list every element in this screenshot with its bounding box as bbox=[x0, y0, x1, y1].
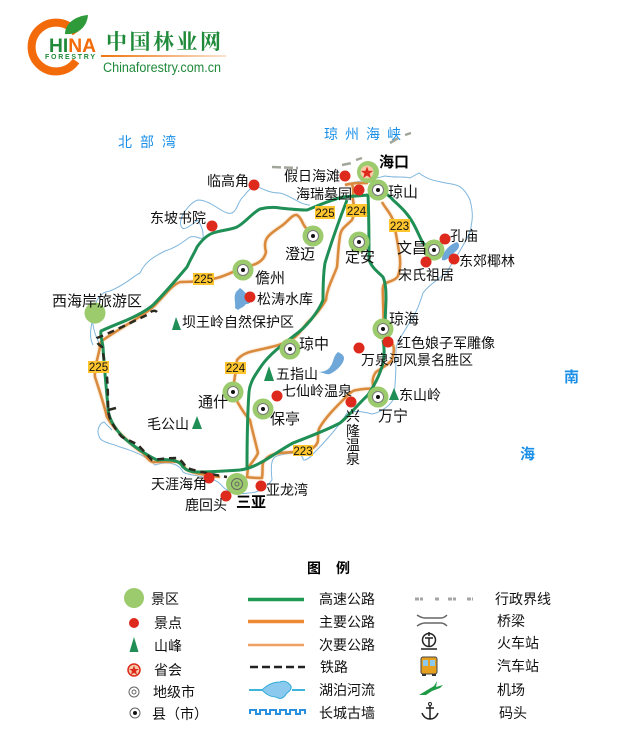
place labels: 保亭 bbox=[270, 410, 300, 428]
logo: China Forestry bbox=[32, 15, 226, 75]
place labels: 坝王岭自然保护区 bbox=[182, 314, 294, 330]
legend: scenic area bbox=[124, 588, 179, 608]
lakes bbox=[235, 242, 459, 374]
place labels: 琼海 bbox=[389, 311, 419, 328]
legend: great wall: 长城古墙 bbox=[319, 705, 375, 721]
sea labels: 海 bbox=[520, 445, 535, 463]
place labels: 鹿回头 bbox=[185, 497, 227, 513]
place labels: 天涯海角 bbox=[151, 476, 207, 492]
place labels: 定安 bbox=[345, 249, 375, 266]
legend: main road: 主要公路 bbox=[319, 614, 375, 630]
logo wordmark HINA: HINA bbox=[49, 36, 96, 57]
place labels: 孔庙 bbox=[450, 228, 478, 244]
legend: airport: 机场 bbox=[497, 682, 525, 698]
legend: lake and river bbox=[249, 681, 375, 698]
place labels: 假日海滩 bbox=[284, 168, 340, 184]
legend: county city: 县（市） bbox=[152, 706, 208, 722]
legend: lake and river: 湖泊河流 bbox=[319, 682, 375, 698]
map bbox=[52, 126, 579, 513]
place labels: 兴 bbox=[346, 408, 360, 424]
place labels: 琼中 bbox=[299, 336, 329, 353]
place labels: 西海岸旅游区 bbox=[52, 293, 142, 310]
legend: expressway: 高速公路 bbox=[319, 591, 375, 607]
administrative boundary bbox=[272, 133, 411, 168]
place labels: 文昌 bbox=[397, 240, 427, 257]
place labels: 泉 bbox=[346, 451, 360, 467]
place labels: 临高角 bbox=[207, 173, 249, 189]
route 225 central: 225 bbox=[194, 274, 213, 286]
place labels: 松涛水库 bbox=[257, 291, 313, 307]
sea labels: 琼州海峡 bbox=[324, 126, 408, 142]
legend: railway station bbox=[421, 632, 539, 651]
route 223 north: 223 bbox=[390, 221, 409, 233]
legend: bus station: 汽车站 bbox=[497, 658, 539, 674]
legend: prefecture city: 地级市 bbox=[153, 684, 195, 700]
legend: great wall bbox=[250, 705, 375, 721]
legend: airport bbox=[419, 681, 525, 698]
legend: scenic spot: 景点 bbox=[154, 615, 182, 631]
place labels: 海口 bbox=[379, 153, 409, 171]
highways bbox=[101, 190, 432, 472]
legend: bus station bbox=[421, 657, 539, 676]
place labels: 七仙岭温泉 bbox=[282, 383, 352, 399]
place labels: 宋氏祖居 bbox=[398, 267, 454, 283]
sea labels bbox=[118, 126, 579, 463]
lake: Wenchang bbox=[442, 242, 459, 260]
legend: railway station: 火车站 bbox=[497, 635, 539, 651]
legend: provincial capital: 省会 bbox=[154, 662, 182, 678]
logo rule bbox=[101, 55, 226, 57]
place labels: 隆 bbox=[346, 423, 360, 439]
city markers bbox=[222, 180, 444, 495]
secondary and main roads bbox=[95, 183, 400, 478]
legend: dock bbox=[422, 702, 527, 721]
legend: secondary road bbox=[248, 637, 375, 653]
place labels: 通什 bbox=[198, 394, 228, 411]
route 224 south: 224 bbox=[226, 363, 246, 375]
place labels: 毛公山 bbox=[147, 416, 189, 432]
lake: Songtao reservoir bbox=[235, 288, 250, 310]
place labels: 万泉河风景名胜区 bbox=[361, 352, 473, 368]
place labels: 温 bbox=[346, 437, 360, 453]
place labels: 东郊椰林 bbox=[459, 253, 515, 269]
place labels: 三亚 bbox=[236, 494, 266, 511]
coastline bbox=[91, 173, 472, 494]
place labels: 亚龙湾 bbox=[266, 482, 308, 498]
icon: orange ring bbox=[32, 23, 76, 71]
lake: Wanquan river bbox=[318, 352, 344, 374]
legend: railway bbox=[250, 659, 348, 675]
legend: expressway bbox=[248, 591, 375, 607]
legend: peak: 山峰 bbox=[154, 638, 182, 654]
legend: scenic area: 景区 bbox=[151, 591, 179, 607]
route shields bbox=[88, 204, 410, 458]
legend title: 图例 bbox=[307, 560, 365, 576]
legend: main road bbox=[248, 614, 375, 630]
scenic spots bbox=[204, 170, 460, 502]
logo url: Chinaforestry.com.cn bbox=[103, 60, 221, 75]
route 224 north: 224 bbox=[347, 206, 367, 218]
sea labels: 北部湾 bbox=[118, 134, 184, 150]
place labels: 东坡书院 bbox=[150, 210, 206, 226]
legend: prefecture city bbox=[129, 684, 195, 700]
place labels bbox=[52, 153, 515, 513]
mountain peaks bbox=[172, 317, 399, 429]
place labels: 儋州 bbox=[255, 270, 285, 287]
place labels: 东山岭 bbox=[399, 387, 441, 403]
place labels: 海瑞墓园 bbox=[296, 186, 352, 202]
railway bbox=[97, 311, 227, 477]
scenic area circles bbox=[84, 161, 379, 324]
sea labels: 南 bbox=[564, 369, 579, 386]
route 223 south: 223 bbox=[293, 446, 313, 458]
legend: administrative boundary bbox=[415, 591, 551, 607]
legend: dock: 码头 bbox=[499, 705, 527, 721]
legend: provincial capital bbox=[128, 662, 182, 678]
legend bbox=[124, 560, 551, 722]
route 225 north: 225 bbox=[315, 208, 335, 220]
legend: secondary road: 次要公路 bbox=[319, 637, 375, 653]
route 225 west: 225 bbox=[89, 362, 108, 374]
place labels: 红色娘子军雕像 bbox=[397, 335, 495, 351]
icon: leaf bbox=[65, 15, 88, 34]
place labels: 澄迈 bbox=[285, 246, 315, 263]
legend: scenic spot bbox=[129, 615, 182, 631]
logo wordmark FORESTRY: FORESTRY bbox=[45, 54, 95, 61]
place labels: 万宁 bbox=[378, 408, 408, 425]
legend: peak bbox=[130, 637, 182, 654]
logo title: 中国林业网 bbox=[106, 30, 221, 54]
place labels: 琼山 bbox=[388, 184, 418, 201]
legend: bridge bbox=[417, 613, 525, 629]
legend: bridge: 桥梁 bbox=[497, 613, 525, 629]
legend: railway: 铁路 bbox=[320, 659, 348, 675]
place labels: 五指山 bbox=[276, 366, 318, 382]
legend: administrative boundary: 行政界线 bbox=[495, 591, 551, 607]
icon: provincial capital star bbox=[360, 166, 374, 178]
